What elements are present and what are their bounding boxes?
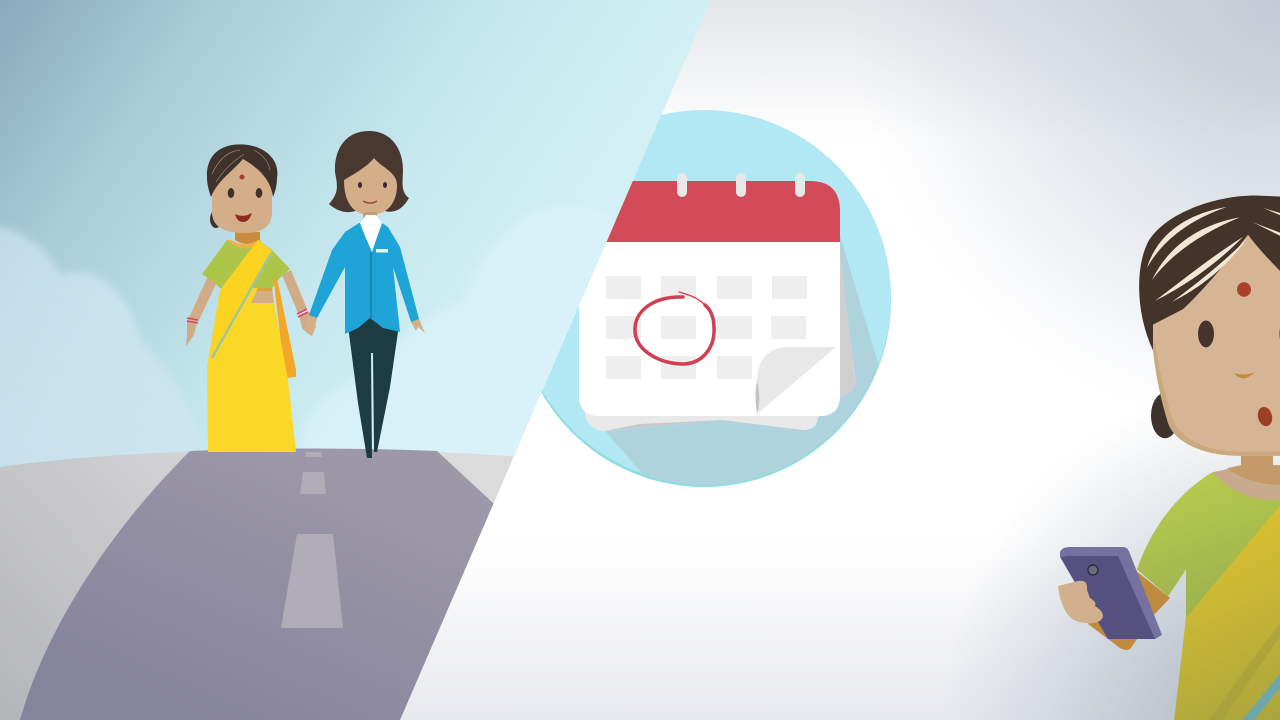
midriff shadow — [256, 287, 272, 291]
shirt collar — [360, 215, 382, 252]
open mouth — [1256, 405, 1274, 428]
hair back — [329, 131, 409, 212]
head — [212, 158, 272, 233]
bindi — [240, 174, 244, 180]
pants — [347, 318, 398, 458]
calendar page — [579, 181, 840, 416]
midriff — [250, 286, 274, 303]
eyes — [228, 188, 262, 198]
saree fold — [1196, 622, 1280, 720]
back calendar sheets — [585, 225, 855, 431]
hair — [207, 144, 277, 197]
calendar red header — [600, 181, 840, 242]
face — [344, 158, 397, 215]
smile — [235, 213, 252, 222]
blouse — [202, 240, 290, 288]
neck — [235, 232, 260, 244]
woman in yellow saree — [186, 144, 316, 452]
bindi — [1237, 282, 1251, 297]
fringe and eyes — [342, 158, 387, 203]
badge circle — [517, 110, 891, 487]
clouds — [0, 218, 617, 467]
collar skin — [1212, 466, 1280, 501]
bun — [1151, 393, 1179, 438]
sky — [0, 0, 711, 503]
neck — [1241, 449, 1273, 480]
phone — [1060, 547, 1162, 639]
second eye — [1280, 322, 1281, 346]
hands — [304, 315, 425, 335]
calendar rings — [677, 173, 805, 197]
calendar badge — [517, 110, 892, 500]
name badge — [376, 249, 388, 252]
calendar day grid — [606, 276, 807, 379]
hand — [1058, 581, 1103, 623]
eye — [1198, 320, 1214, 347]
body and head — [1137, 195, 1280, 720]
neck — [363, 212, 377, 227]
woman in blue jacket — [304, 131, 425, 458]
arms — [186, 270, 316, 346]
saree skirt — [207, 288, 296, 452]
calendar long shadow — [606, 236, 878, 485]
neckline — [227, 240, 262, 248]
face — [1153, 221, 1280, 456]
saree blue border — [1238, 676, 1280, 720]
jacket — [309, 223, 419, 334]
page curl — [756, 347, 836, 414]
red circle marking the date — [635, 292, 714, 364]
nose — [1234, 372, 1255, 378]
hair highlights — [212, 150, 270, 182]
panel: left sky and road — [0, 0, 720, 720]
bangles — [187, 309, 308, 323]
ground — [0, 449, 560, 720]
woman with phone close-up — [1058, 195, 1280, 720]
arm — [1088, 570, 1170, 650]
road markings — [281, 452, 343, 628]
blouse — [1137, 472, 1280, 620]
jacket seam — [370, 252, 372, 318]
face shadow edge — [1153, 341, 1280, 456]
saree drape — [207, 240, 272, 367]
road — [20, 448, 494, 720]
orange pallu strip — [273, 274, 296, 378]
saree — [1172, 505, 1280, 720]
bun — [210, 210, 222, 228]
hair — [1139, 195, 1280, 350]
hair highlights — [1147, 207, 1280, 302]
saree border — [212, 253, 271, 358]
